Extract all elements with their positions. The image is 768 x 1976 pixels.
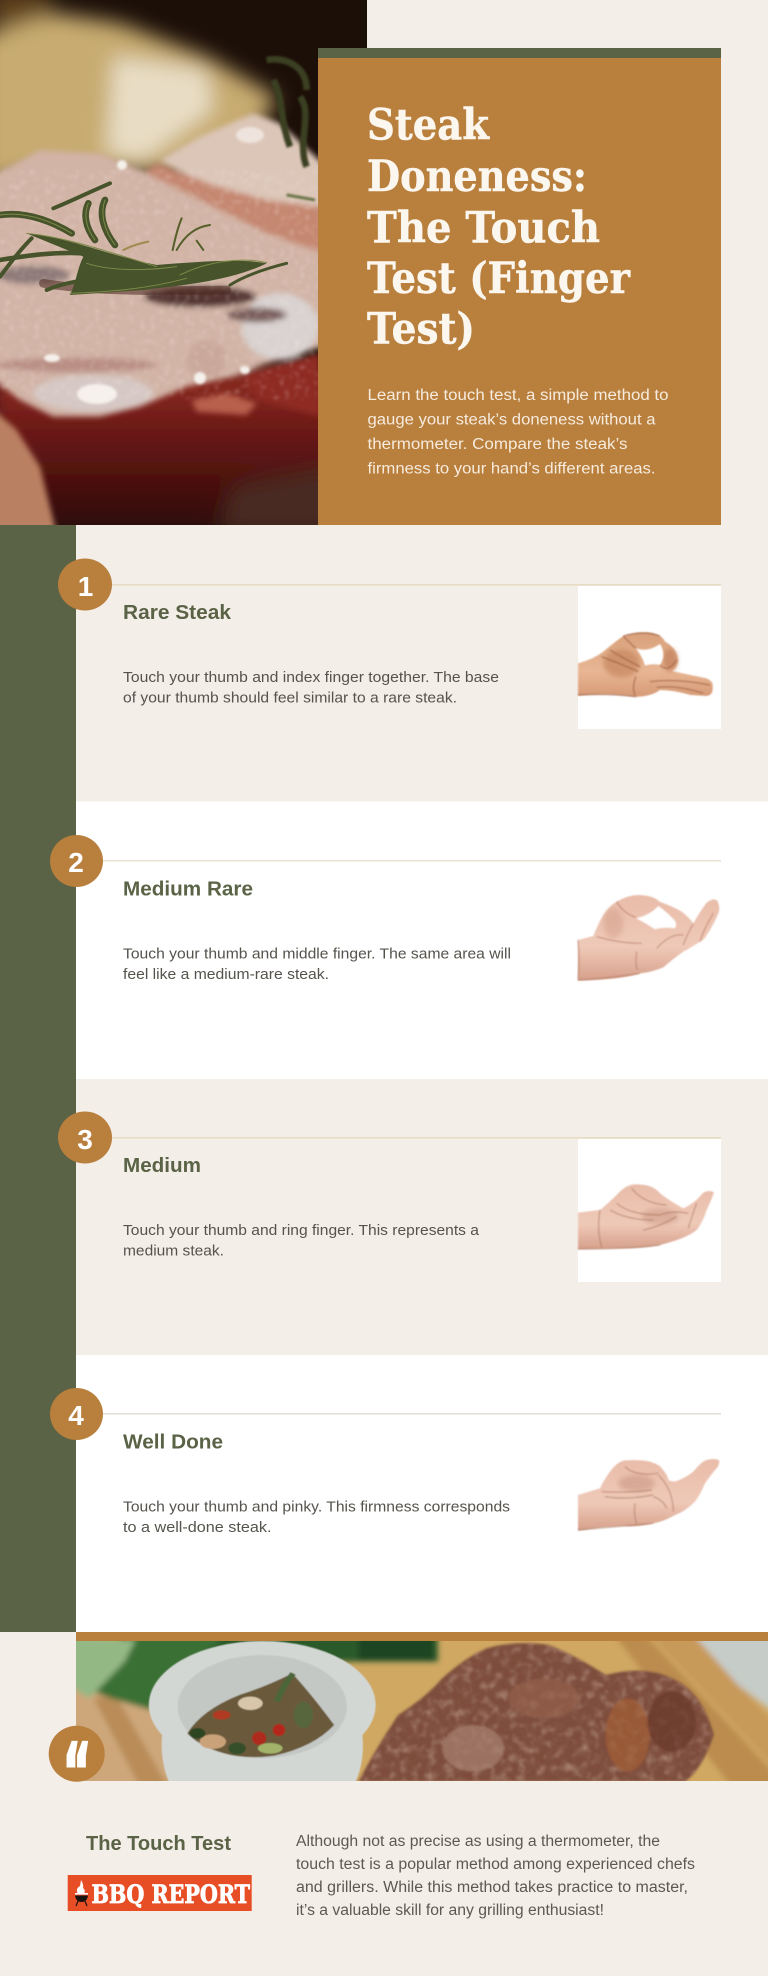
quote badge [49, 1726, 105, 1816]
steak texture [360, 1643, 712, 1781]
upper steak slab [160, 113, 333, 213]
step 4 text: Touch your thumb and pinky. This firmness corresponds [123, 1500, 510, 1516]
step 2 text: Touch your thumb and middle finger. The same area will [123, 946, 511, 962]
sidebar [0, 525, 76, 1632]
step 2 number badge [50, 835, 103, 887]
wood board [76, 1688, 168, 1781]
leaves [120, 1635, 438, 1662]
icon: grill [75, 1880, 88, 1906]
logo: bbq report [68, 1875, 252, 1911]
step 4 number badge [50, 1388, 103, 1440]
box background [318, 48, 721, 525]
panel: title box [318, 48, 721, 525]
step 4 rule [103, 1413, 721, 1415]
step 1 text [123, 670, 499, 706]
intro paragraph: Learn the touch test, a simple method to [368, 387, 668, 404]
icon: hand, thumb and middle finger [578, 895, 719, 981]
upper rosemary sprig [267, 59, 315, 200]
panel: step 2 medium rare [50, 802, 768, 1079]
step 3 rule [112, 1137, 721, 1139]
step 2 background [76, 802, 768, 1079]
step 2 rule [103, 860, 721, 862]
step 1 heading: Rare Steak [123, 602, 232, 624]
step 3 text: medium steak. [123, 1244, 224, 1260]
step 2 heading: Medium Rare [123, 878, 253, 900]
step 3 text [123, 1223, 480, 1260]
step 1 number badge: 1 [78, 571, 93, 602]
steak [358, 1643, 714, 1782]
step 1 number badge [58, 558, 112, 610]
step 4 text [123, 1500, 510, 1536]
photo: grilled steak with salsa [76, 1641, 768, 1781]
rosemary [0, 183, 287, 295]
panel: step 4 well done [50, 1355, 768, 1632]
main surface [0, 150, 333, 417]
title: Steak [367, 100, 490, 150]
step 4 heading: Well Done [123, 1432, 223, 1454]
intro paragraph: thermometer. Compare the steak’s [368, 436, 628, 453]
step 1 background [76, 525, 768, 802]
intro paragraph: gauge your steak’s doneness without a [368, 412, 656, 428]
closing paragraph: it’s a valuable skill for any grilling enthusiast! [296, 1902, 604, 1919]
step 1 image box [578, 586, 721, 729]
title: The Touch [367, 204, 600, 254]
icon: hand, thumb and ring finger [578, 1184, 714, 1249]
title: Test) [367, 304, 475, 354]
bright spots [44, 127, 264, 404]
step 3 number badge [58, 1112, 112, 1164]
panel: step 3 medium [58, 1079, 768, 1355]
step 2 text [123, 946, 511, 983]
photo: raw steak with rosemary [0, 0, 367, 533]
step 4 number badge: 4 [68, 1400, 84, 1431]
title: Test (Finger [367, 254, 631, 304]
step 4 background [76, 1355, 768, 1632]
footer brand: the touch test: The Touch Test [86, 1833, 231, 1855]
intro paragraph: firmness to your hand’s different areas. [368, 460, 656, 478]
step 1 text: Touch your thumb and index finger together. The base [123, 670, 499, 686]
quotation mark: “ [63, 1726, 91, 1816]
grey top-right [694, 1641, 768, 1713]
icon: hand, thumb and index finger [578, 632, 713, 697]
step 1 text: of your thumb should feel similar to a rare steak. [123, 690, 457, 706]
closing paragraph: Although not as precise as using a thermometer, the [296, 1833, 660, 1850]
logo wordmark: BBQ REPORT [92, 1880, 250, 1909]
panel: step 1 rare steak [58, 525, 768, 802]
closing paragraph [296, 1833, 695, 1919]
intro paragraph [368, 387, 668, 478]
step 3 image box [578, 1139, 721, 1282]
bottom-left lump [0, 407, 57, 533]
red highlights [192, 393, 257, 415]
salsa [187, 1673, 334, 1757]
accent bar above bottom photo [76, 1632, 768, 1641]
closing paragraph: and grillers. While this method takes practice to master, [296, 1879, 688, 1896]
icon: hand, thumb and pinky [578, 1459, 719, 1531]
title [367, 100, 631, 354]
step 3 text: Touch your thumb and ring finger. This represents a [123, 1223, 480, 1239]
top accent bar [318, 48, 721, 58]
step 2 number badge: 2 [68, 847, 84, 878]
step 4 text: to a well-done steak. [123, 1520, 272, 1536]
closing paragraph: touch test is a popular method among experienced chefs [296, 1856, 695, 1873]
step 1 rule [112, 584, 721, 586]
meat texture [0, 170, 318, 400]
mortar bowl [162, 1735, 363, 1783]
step 3 background [76, 1079, 768, 1355]
title: Doneness: [367, 152, 587, 202]
step 3 number badge: 3 [77, 1124, 93, 1155]
step 2 text: feel like a medium-rare steak. [123, 967, 329, 983]
step 3 heading: Medium [123, 1155, 201, 1177]
